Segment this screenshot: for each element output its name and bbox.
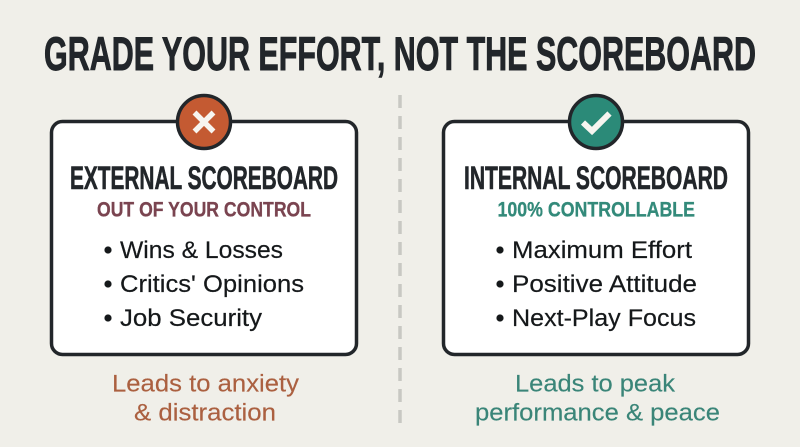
internal list: Next-Play Focus xyxy=(512,305,696,332)
internal list xyxy=(496,237,697,332)
external outcome: Leads to anxiety xyxy=(112,370,300,398)
internal outcome: Leads to peak xyxy=(515,370,676,398)
internal card box xyxy=(444,122,748,354)
internal subheading: 100% CONTROLLABLE xyxy=(498,198,695,222)
internal list: Maximum Effort xyxy=(512,237,692,264)
panel: external scoreboard xyxy=(52,96,356,354)
external heading: EXTERNAL SCOREBOARD xyxy=(70,160,338,196)
external list: Wins & Losses xyxy=(120,237,283,264)
external card box xyxy=(52,122,356,354)
external subheading: OUT OF YOUR CONTROL xyxy=(97,198,311,222)
external outcome xyxy=(112,370,300,426)
internal outcome: performance & peace xyxy=(475,400,720,426)
external list xyxy=(104,237,304,332)
icon: red cross badge xyxy=(178,96,230,148)
internal list: Positive Attitude xyxy=(512,271,697,298)
internal outcome xyxy=(475,370,720,426)
external list: Critics' Opinions xyxy=(120,271,304,298)
external list: Job Security xyxy=(120,305,263,332)
icon: green check badge xyxy=(570,96,622,148)
panel: internal scoreboard xyxy=(444,96,748,354)
external outcome: & distraction xyxy=(134,400,276,426)
